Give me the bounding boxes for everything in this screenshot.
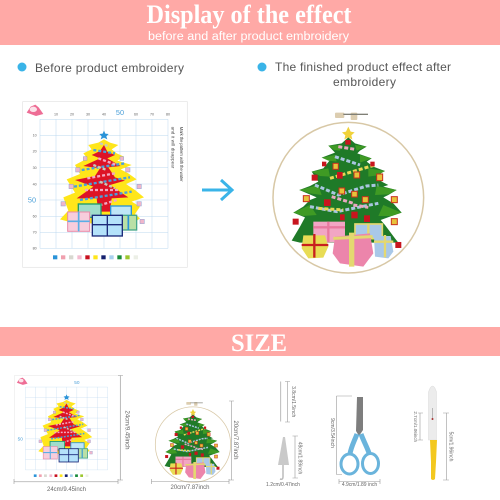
item: seam ripper: 2.7cm/1.06inch <box>413 411 418 442</box>
subtitle: before and after product embroidery <box>148 31 349 43</box>
blue 50 left: 50 <box>28 196 36 205</box>
grid left numbers: 30 <box>33 166 37 170</box>
item: hoop with size: 20cm/7.87inch <box>170 485 210 491</box>
grid left numbers: 40 <box>33 182 37 186</box>
size heading: SIZE <box>231 330 287 357</box>
grid top numbers <box>54 113 170 117</box>
blue 50 top: 50 <box>116 108 124 117</box>
vertical note <box>171 127 184 182</box>
grid left numbers: 10 <box>33 134 37 138</box>
grid left numbers: 70 <box>33 231 37 235</box>
item: seam ripper: 5cm/1.96inch <box>448 432 454 462</box>
item: pattern sheet with size: 24cm/9.45inch <box>47 487 86 493</box>
grid top numbers: 70 <box>150 113 154 117</box>
item: needle <box>281 382 296 422</box>
item: threader <box>266 436 302 488</box>
panel: finished embroidery hoop <box>273 113 424 273</box>
header band: display of the effect <box>0 0 500 45</box>
item: threader: 48cm/1.89inch <box>296 442 302 474</box>
item: scissors: 4.9cm/1.89 inch <box>342 482 377 488</box>
item: pattern sheet with size: 50 <box>18 437 23 442</box>
panel: printed pattern before embroidery <box>23 102 187 267</box>
caption: after: The finished product effect after <box>275 60 451 74</box>
caption: before: Before product embroidery <box>35 61 184 75</box>
grid left numbers <box>33 134 37 251</box>
item: needle: 3.8cm/1.5inch <box>290 386 296 417</box>
grid top numbers: 10 <box>54 113 58 117</box>
arrow <box>202 180 232 200</box>
title: Display of the effect <box>146 0 352 29</box>
caption: after: embroidery <box>333 75 396 89</box>
caption: after <box>258 60 451 89</box>
grid top numbers: 60 <box>134 113 138 117</box>
grid top numbers: 40 <box>102 113 106 117</box>
vertical note: and it will disappear <box>171 127 176 169</box>
grid left numbers: 80 <box>33 247 37 251</box>
item: pattern sheet with size: 24cm/9.45inch <box>124 410 130 450</box>
item: pattern sheet with size <box>14 376 130 493</box>
grid left numbers: 20 <box>33 150 37 154</box>
vertical note: Mark the pattern with the water <box>179 127 184 182</box>
item: hoop with size: 20cm/7.87inch <box>232 420 238 460</box>
grid top numbers: 20 <box>70 113 74 117</box>
item: threader: 1.2cm/0.47inch <box>266 482 300 488</box>
size band <box>0 327 500 357</box>
grid left numbers: 60 <box>33 215 37 219</box>
item: seam ripper <box>413 386 454 480</box>
item: scissors: 9cm/3.54inch <box>329 418 335 448</box>
item: pattern sheet with size: 50 <box>74 380 80 385</box>
grid top numbers: 30 <box>86 113 90 117</box>
item: hoop with size <box>152 401 238 491</box>
grid top numbers: 80 <box>166 113 170 117</box>
item: scissors <box>329 396 380 488</box>
